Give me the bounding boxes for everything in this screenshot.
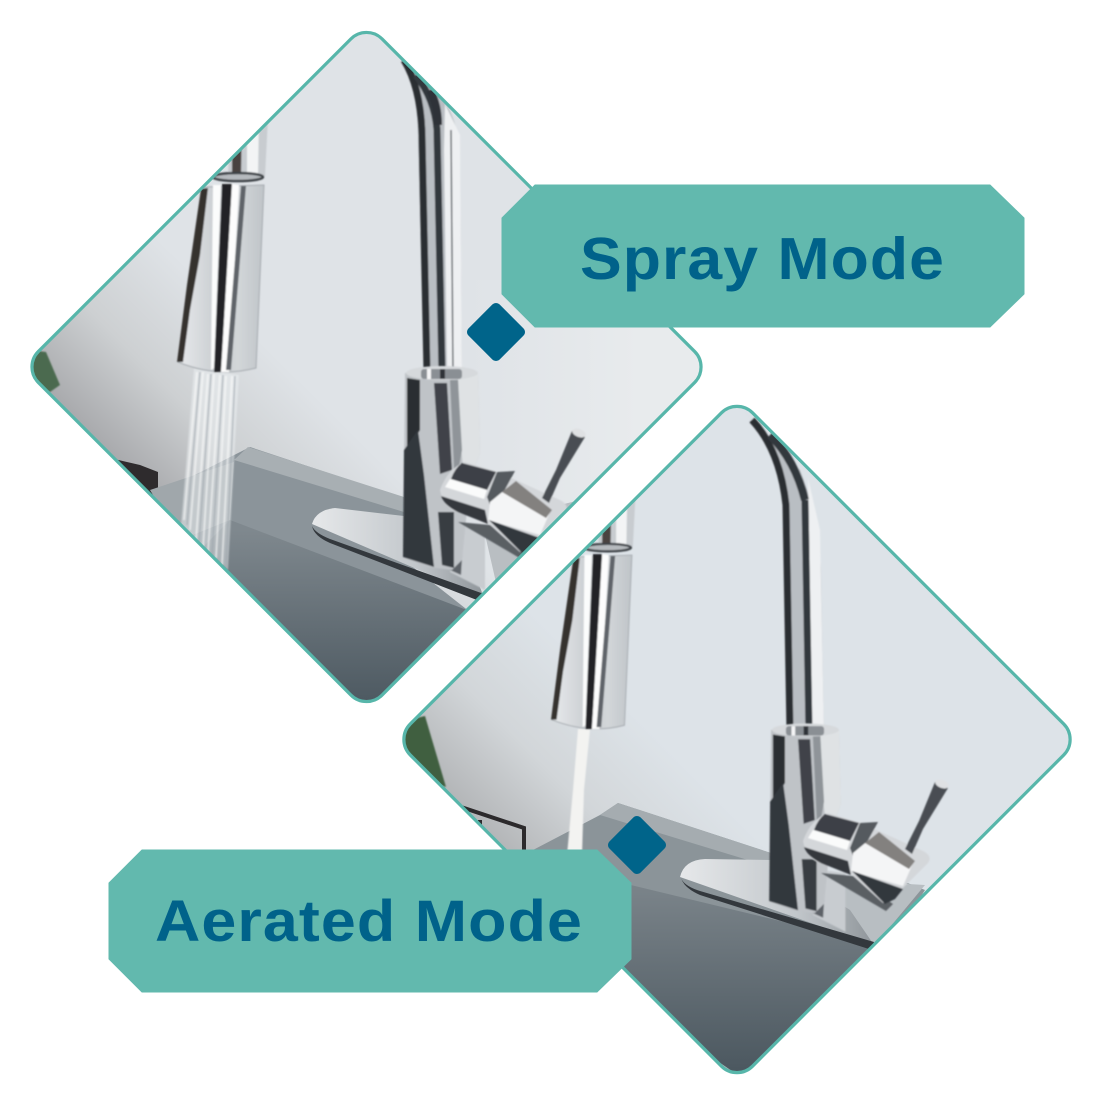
icon: plant: [400, 716, 446, 787]
faucet handle: [440, 427, 587, 560]
counter surface: [193, 447, 466, 610]
panel border: [395, 397, 1079, 1082]
faucet spout: [400, 58, 462, 372]
icon: spray diamond: [465, 301, 527, 363]
label text: Aerated Mode: [155, 889, 583, 954]
label text: Spray Mode: [580, 226, 945, 292]
label: spray mode: [502, 185, 1024, 327]
dark box: [118, 460, 158, 495]
icon: plant: [30, 350, 60, 392]
dark frame: [461, 807, 524, 850]
label banner: [109, 850, 631, 992]
counter light left side: [150, 462, 234, 540]
faucet body: [769, 723, 845, 932]
sink front face: [624, 885, 868, 1071]
faucet handle: [803, 778, 950, 911]
faucet spout: [748, 417, 824, 726]
counter surface: [534, 803, 925, 928]
icon: aerated diamond: [606, 814, 668, 876]
light counter right of faucet: [486, 502, 573, 580]
panel border: [23, 23, 710, 711]
label: aerated mode: [109, 850, 631, 992]
deck plate: [680, 859, 874, 950]
counter rim: [600, 803, 770, 860]
water spray: [181, 368, 239, 570]
light wall right side: [622, 328, 699, 452]
wall background: [418, 408, 1068, 1070]
water stream: [567, 729, 590, 855]
spray head: [177, 118, 268, 372]
wall background: [40, 34, 598, 609]
counter rim: [234, 447, 404, 512]
deck plate: [312, 508, 484, 602]
label banner: [502, 185, 1024, 327]
panel: spray mode photo: [20, 20, 720, 720]
panel: aerated mode photo: [390, 390, 1090, 1090]
faucet body: [403, 366, 485, 590]
spray head: [551, 493, 636, 729]
sink front face: [205, 520, 466, 700]
light counter right of faucet: [845, 884, 925, 942]
